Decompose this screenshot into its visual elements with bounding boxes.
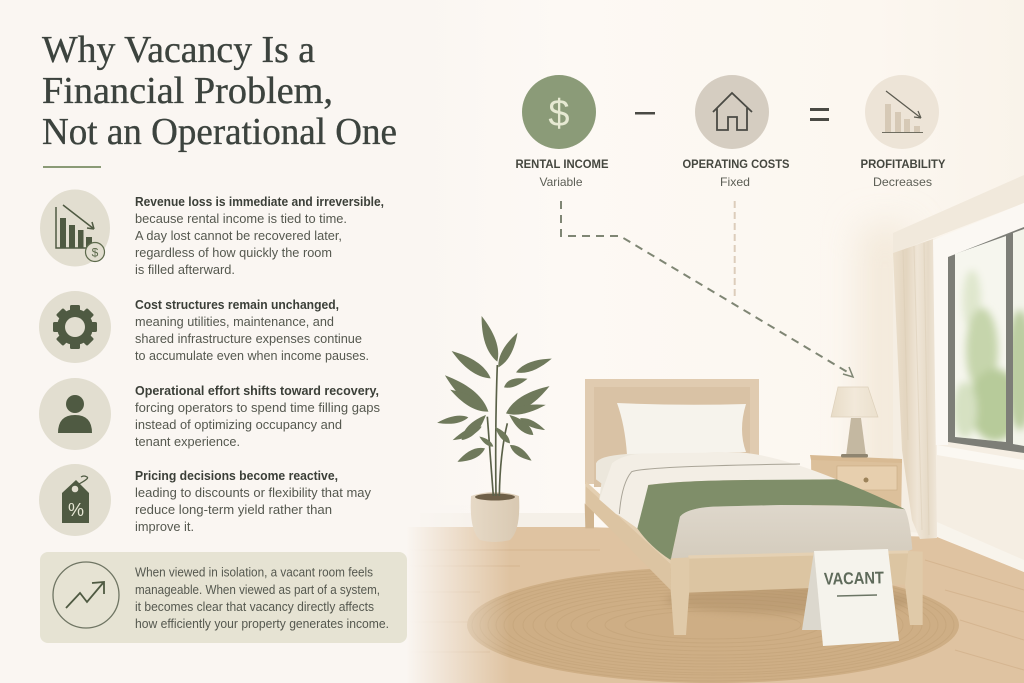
text: revenue loss: A day lost cannot be recovered later, [135, 229, 342, 243]
callout text: When viewed in isolation, a vacant room feels [135, 566, 373, 580]
formula: rental income: RENTAL INCOME [516, 159, 609, 171]
under sheet [596, 453, 680, 514]
rear leg [585, 503, 594, 528]
item: pricing decisions [39, 464, 372, 536]
window [948, 227, 1024, 453]
text: pricing decisions: Pricing decisions become reactive, [135, 469, 338, 483]
icon: gear [39, 291, 111, 363]
green throw blanket [637, 479, 905, 560]
item: cost structures [39, 291, 369, 363]
icon: falling bar chart with dollar coin [40, 190, 110, 266]
front legs [671, 551, 923, 635]
plant pot [471, 492, 519, 542]
text: operational effort: tenant experience. [135, 435, 240, 449]
window surround [933, 203, 1024, 445]
title: Not an Operational One [42, 111, 397, 153]
vacant sign [802, 549, 899, 646]
window sill [937, 445, 1024, 470]
icon: percent price tag: % [68, 500, 84, 520]
text: revenue loss: because rental income is tied to time. [135, 212, 347, 226]
formula: rental income: Variable [540, 175, 583, 189]
sign text: VACANT [824, 568, 885, 589]
text: pricing decisions: improve it. [135, 520, 194, 534]
pillow [617, 403, 746, 455]
side rail [585, 481, 671, 590]
text: cost structures: Cost structures remain unchanged, [135, 298, 339, 312]
callout text [135, 566, 389, 631]
text: operational effort: instead of optimizing occupancy and [135, 418, 342, 432]
callout [40, 552, 407, 643]
mattress [671, 505, 912, 560]
plant [437, 314, 553, 496]
title [42, 29, 397, 153]
arrow: rental income dashed path to lamp [561, 201, 853, 377]
icon: rising trend line [53, 562, 119, 628]
arrow: operating costs dashed connector [734, 201, 736, 297]
formula: rental income [516, 75, 609, 189]
equals sign [810, 108, 829, 121]
icon: falling profit chart [865, 75, 939, 149]
icon: person [39, 378, 111, 450]
text: cost structures [135, 298, 369, 363]
formula: profitability [860, 75, 946, 189]
curtain [893, 239, 937, 539]
formula: profitability: Decreases [873, 175, 932, 189]
right wall [893, 215, 1024, 570]
left baseboard [420, 513, 586, 527]
text: revenue loss: is filled afterward. [135, 263, 235, 277]
text: cost structures: to accumulate even when income pauses. [135, 349, 369, 363]
icon: percent price tag [39, 464, 111, 536]
title: Financial Problem, [42, 70, 333, 112]
callout text: it becomes clear that vacancy directly affects [135, 600, 374, 614]
item: revenue loss [40, 190, 384, 277]
icon: dollar: $ [548, 93, 570, 135]
minus sign [635, 112, 655, 114]
formula: operating costs: OPERATING COSTS [682, 159, 790, 171]
text: cost structures: meaning utilities, maintenance, and [135, 315, 334, 329]
nightstand [810, 455, 902, 525]
front rail [688, 552, 908, 593]
under-bed shadow [665, 586, 915, 614]
ceiling beam [893, 175, 1024, 253]
bed [585, 452, 923, 635]
text: revenue loss [135, 195, 384, 277]
text: operational effort: forcing operators to spend time filling gaps [135, 401, 380, 415]
text: revenue loss: regardless of how quickly the room [135, 246, 332, 260]
table lamp [831, 387, 878, 458]
callout text: how efficiently your property generates income. [135, 617, 389, 631]
bed sheet [599, 452, 837, 528]
formula: operating costs [682, 75, 790, 189]
text: operational effort [135, 384, 380, 449]
text: pricing decisions: reduce long-term yield rather than [135, 503, 332, 517]
formula: profitability: PROFITABILITY [860, 159, 946, 171]
icon: falling bar chart with dollar coin: $ [92, 246, 99, 260]
icon: house [695, 75, 769, 149]
text: revenue loss: Revenue loss is immediate and irreversible, [135, 195, 384, 209]
text: operational effort: Operational effort shifts toward recovery, [135, 384, 379, 398]
text: cost structures: shared infrastructure expenses continue [135, 332, 362, 346]
right baseboard [937, 522, 1024, 572]
item: operational effort [39, 378, 380, 450]
text: pricing decisions [135, 469, 372, 534]
title: Why Vacancy Is a [42, 29, 315, 71]
left fade over floor [380, 505, 510, 683]
text: pricing decisions: leading to discounts or flexibility that may [135, 486, 372, 500]
illustration: bedroom scene [380, 175, 1024, 683]
formula: operating costs: Fixed [720, 175, 750, 189]
callout text: manageable. When viewed as part of a system, [135, 583, 380, 597]
floor [400, 527, 1024, 683]
rug [467, 567, 959, 683]
headboard [585, 379, 759, 487]
